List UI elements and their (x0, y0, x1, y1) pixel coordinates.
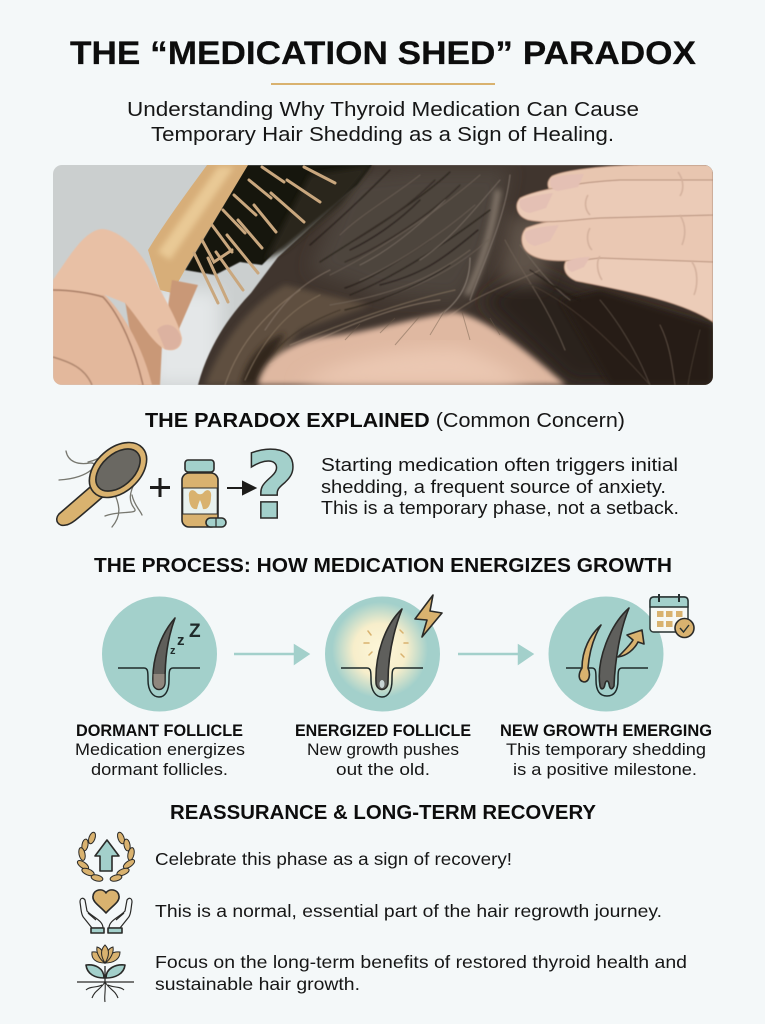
text: normal part of journey: This is a normal, essential part of the hair regrowth journey. (155, 901, 662, 921)
paradox explanation text: This is a temporary phase, not a setback. (321, 497, 679, 518)
icon: hairbrush with shed hairs (57, 432, 157, 527)
icon: laurel wreath with up arrow (76, 831, 136, 882)
heading: reassurance: REASSURANCE & LONG-TERM RECOVERY (170, 801, 596, 824)
paradox explanation text: shedding, a frequent source of anxiety. (321, 476, 666, 497)
left hand (125, 280, 198, 385)
text: long-term benefits: Focus on the long-term benefits of restored thyroid health and (155, 952, 687, 972)
arrow to question mark (227, 482, 255, 494)
arrow: step 2 to step 3 (458, 646, 532, 663)
icon: question mark: ? (245, 432, 299, 540)
paradox explanation text (321, 454, 679, 518)
step 3 caption (500, 721, 712, 779)
subtitle: Understanding Why Thyroid Medication Can Cause (127, 98, 639, 121)
forehead skin (258, 312, 566, 385)
hair mass (198, 165, 713, 385)
step 1: dormant follicle icon: z (177, 632, 184, 649)
text: celebrate: Celebrate this phase as a sign of recovery! (155, 849, 512, 869)
icon: calendar with check (650, 594, 694, 638)
step 3 caption: This temporary shedding (506, 740, 706, 759)
paradox explanation text: Starting medication often triggers initial (321, 454, 678, 475)
brush handle (148, 165, 248, 293)
heading: the process: THE PROCESS: HOW MEDICATION ENERGIZES GROWTH (94, 554, 672, 577)
subtitle: Temporary Hair Shedding as a Sign of Healing. (151, 123, 614, 146)
title underline (271, 83, 495, 85)
step 2 caption (295, 721, 471, 779)
step 3 caption: is a positive milestone. (513, 760, 697, 779)
step 1: dormant follicle icon (102, 596, 217, 712)
brush pad (185, 165, 372, 275)
photo: hands brushing hair at the parting (53, 165, 713, 385)
step 1 caption: DORMANT FOLLICLE (76, 721, 243, 740)
step 2 caption: out the old. (336, 760, 430, 779)
hairline wisps (345, 310, 500, 345)
step 3 caption: NEW GROWTH EMERGING (500, 721, 712, 740)
step 2: energized follicle icon (325, 595, 442, 712)
subtitle (127, 98, 639, 146)
right hand fingers (517, 165, 713, 322)
text: long-term benefits (155, 952, 687, 994)
step 2 caption: New growth pushes (307, 740, 459, 759)
finger nails (520, 182, 589, 272)
plus sign (150, 478, 170, 497)
step 2 caption: ENERGIZED FOLLICLE (295, 721, 471, 740)
step 3: new growth icon (548, 594, 694, 712)
text: long-term benefits: sustainable hair growth. (155, 974, 360, 994)
step 1 caption: Medication energizes (75, 740, 245, 759)
bristles (194, 167, 335, 303)
icon: lotus with roots (77, 945, 134, 1002)
arrow: step 1 to step 2 (234, 646, 308, 663)
strands (225, 170, 700, 385)
step 1: dormant follicle icon: Z (189, 621, 201, 642)
step 1 caption: dormant follicles. (91, 760, 228, 779)
step 1: dormant follicle icon: z (170, 645, 176, 657)
icon: hands holding heart (80, 890, 132, 933)
title: THE “MEDICATION SHED” PARADOX (70, 35, 697, 71)
icon: thyroid medication bottle (182, 460, 226, 527)
heading: the paradox explained: THE PARADOX EXPLAINED (Common Concern) (145, 409, 625, 432)
knuckle creases (586, 172, 697, 295)
step 1 caption (75, 721, 245, 779)
